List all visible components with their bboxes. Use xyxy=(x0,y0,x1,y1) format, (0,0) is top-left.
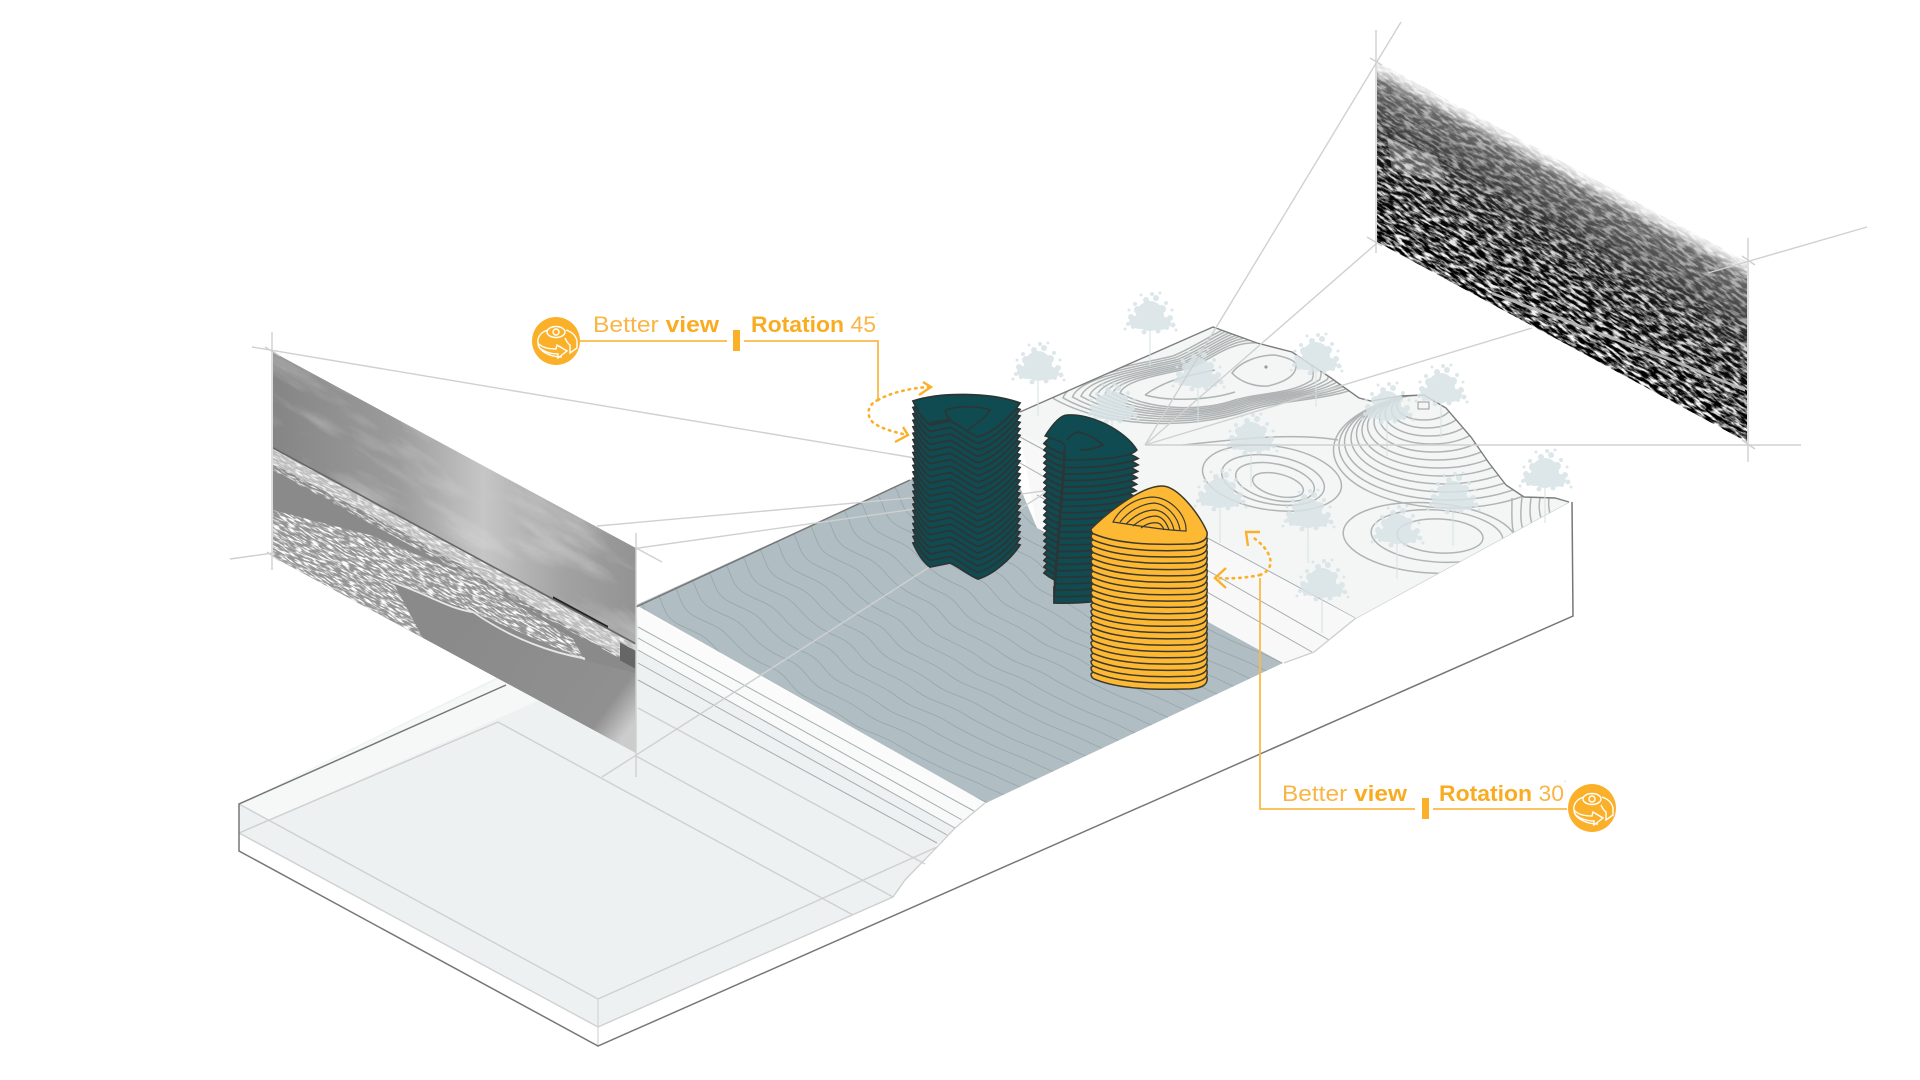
photo guide ticks left xyxy=(230,332,662,777)
callout label right: Rotation 45 xyxy=(751,312,876,337)
leader line xyxy=(1260,578,1567,809)
rotation arrows xyxy=(1215,532,1271,588)
photo guide ticks right xyxy=(1367,30,1867,462)
panel: beach sand surface xyxy=(239,607,986,1046)
beach contour bands xyxy=(638,627,974,843)
icon: rotating eye xyxy=(532,317,580,365)
degree mark: ° xyxy=(1564,781,1567,787)
callout label left: Better view xyxy=(1282,781,1408,806)
callout: better view rotation 45 xyxy=(532,312,931,442)
sight lines xyxy=(252,22,1801,777)
summit dot and marker xyxy=(1264,365,1429,409)
photo: aerial view of town and fields xyxy=(1377,62,1747,442)
slab outer edges xyxy=(239,480,1573,1046)
panel: hilly land terrain xyxy=(1020,313,1570,618)
leader line xyxy=(580,341,878,400)
icon: rotating eye xyxy=(1568,784,1616,832)
divider bar xyxy=(1422,798,1429,819)
slab base body xyxy=(239,327,1573,1046)
terrain skyline xyxy=(1020,327,1569,502)
building: teal tower, second xyxy=(1044,415,1138,603)
callout: better view rotation 30 xyxy=(1215,532,1616,832)
divider bar xyxy=(733,330,740,351)
degree mark: ° xyxy=(876,313,879,319)
contour lines xyxy=(1052,330,1550,574)
photo: beach and sky xyxy=(273,352,636,753)
callout label left: Better view xyxy=(593,312,720,337)
trees xyxy=(1012,292,1572,633)
building: teal tower, rotated 45 xyxy=(913,394,1020,579)
rotation arrows xyxy=(869,382,931,442)
callout label right: Rotation 30 xyxy=(1439,781,1564,806)
panel: white band beside land xyxy=(1020,433,1569,663)
building: yellow tower, rotated 30 xyxy=(1091,486,1207,689)
panel: shallow water contour plane xyxy=(636,479,1283,803)
